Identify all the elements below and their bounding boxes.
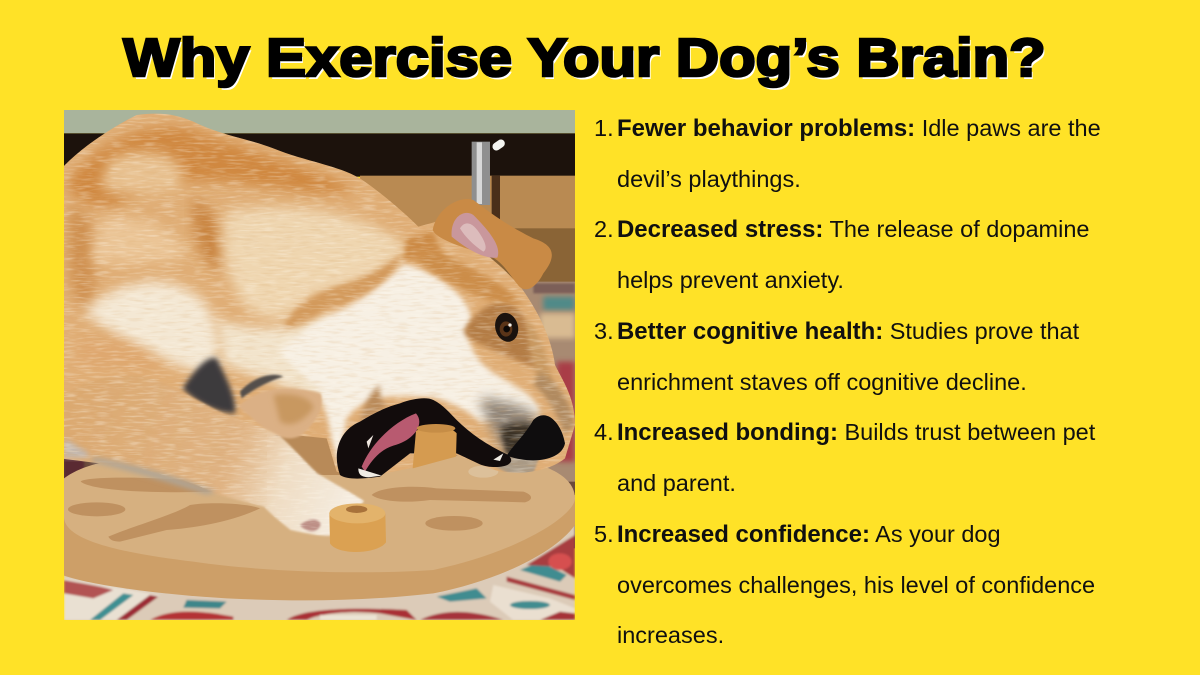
dog nose xyxy=(507,415,565,460)
treat on board xyxy=(329,503,386,552)
item 4: Increased bonding: Builds trust between pet xyxy=(617,419,1095,446)
dog eye xyxy=(495,312,518,342)
dog ear xyxy=(433,199,552,289)
item 5 xyxy=(594,521,1095,648)
fur: orange around eye xyxy=(463,302,540,368)
fur: muzzle xyxy=(533,372,575,435)
item 3: enrichment staves off cognitive decline. xyxy=(617,369,1027,395)
fur texture xyxy=(64,114,575,473)
belly shadow xyxy=(183,358,283,413)
item 4: and parent. xyxy=(617,470,736,496)
item 5: overcomes challenges, his level of confidence xyxy=(617,572,1095,598)
fur: orange brow over mouth xyxy=(360,385,388,423)
item 1: 1. xyxy=(594,115,614,141)
dog mouth xyxy=(337,398,511,479)
item 3 xyxy=(594,318,1079,395)
item 2: 2. xyxy=(594,216,614,242)
item 5: increases. xyxy=(617,622,724,648)
fur: pale flank xyxy=(224,207,407,319)
dog body xyxy=(64,114,575,474)
item 5: Increased confidence: As your dog xyxy=(617,521,1001,548)
item 2 xyxy=(594,216,1089,293)
item 2: helps prevent anxiety. xyxy=(617,267,844,293)
item 1: Fewer behavior problems: Idle paws are the xyxy=(617,115,1101,142)
treat in mouth xyxy=(413,424,457,468)
item 4: 4. xyxy=(594,419,614,445)
board side xyxy=(64,495,575,600)
front leg xyxy=(60,372,367,538)
item 5: 5. xyxy=(594,521,614,547)
item 1: devil’s playthings. xyxy=(617,166,801,192)
fur: darker orange back xyxy=(67,127,353,206)
item 1 xyxy=(594,115,1101,192)
board top xyxy=(64,455,575,572)
item 3: 3. xyxy=(594,318,614,344)
board holes and slots xyxy=(68,425,531,542)
item 3: Better cognitive health: Studies prove that xyxy=(617,318,1079,345)
puzzle board xyxy=(64,425,575,600)
fur: orange shoulder streak xyxy=(283,255,400,328)
photo: dog playing with a puzzle board xyxy=(64,110,575,620)
rug xyxy=(64,459,575,620)
title: Why Exercise Your Dog’s Brain? xyxy=(123,28,1046,88)
second foreleg xyxy=(238,388,322,438)
fur: cream chest xyxy=(217,312,347,405)
fur: white chest and cheek xyxy=(280,263,540,468)
item 2: Decreased stress: The release of dopamine xyxy=(617,216,1089,243)
item 4 xyxy=(594,419,1096,496)
fur: white side patch xyxy=(83,281,219,375)
background: room xyxy=(64,110,575,548)
